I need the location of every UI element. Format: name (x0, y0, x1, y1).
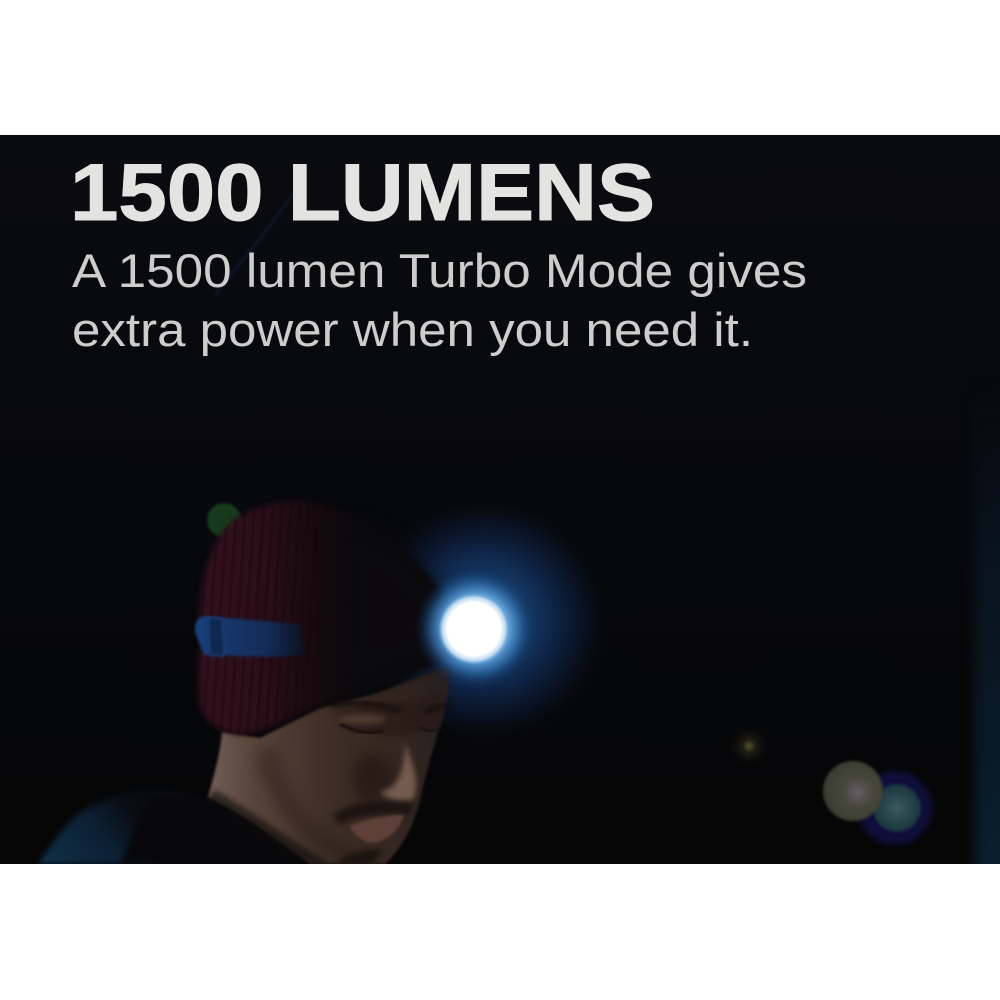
right eyebrow (425, 705, 449, 712)
chin beard (335, 850, 384, 864)
knit body (199, 502, 460, 735)
dark front of beanie (414, 556, 447, 672)
description line 2: extra power when you need it. (72, 303, 753, 356)
headlamp beam (438, 593, 510, 665)
face and neck (205, 664, 450, 864)
left eyebrow (332, 703, 400, 711)
blue ring (858, 771, 932, 845)
neck shadow at the collar (205, 790, 330, 864)
upper eyelid highlight (338, 714, 386, 724)
moustache (333, 801, 413, 825)
jacket (37, 791, 163, 864)
infographic canvas (0, 135, 1000, 864)
wide headlamp glow (400, 511, 595, 730)
strap buckle (209, 618, 224, 656)
title: 1500 LUMENS (70, 148, 655, 238)
lens flare: yellow spot (736, 734, 762, 758)
nose side shadow (353, 756, 389, 799)
beanie (195, 502, 460, 735)
teal circle (873, 784, 921, 832)
right eye (420, 727, 442, 731)
lens flare: circles (823, 761, 932, 845)
nose highlight (380, 742, 416, 802)
knit ribs (202, 510, 272, 734)
dark jacket strap and collar (120, 824, 169, 864)
faint branch behind the title (214, 192, 293, 296)
photo: man wearing headlamp at night (0, 135, 1000, 880)
description line 1: A 1500 lumen Turbo Mode gives (72, 244, 807, 297)
left eye (340, 724, 382, 733)
description (72, 244, 807, 356)
headlamp blue glow (416, 574, 530, 684)
skin (208, 664, 450, 864)
tree at right edge (975, 380, 1000, 880)
eye socket shadow (340, 709, 402, 732)
headlamp strap (195, 616, 306, 657)
night background (0, 135, 1000, 864)
pale circle (823, 761, 883, 821)
lips (350, 815, 404, 843)
lens flare: green spot (207, 503, 241, 537)
beard shading on jaw (256, 749, 320, 840)
